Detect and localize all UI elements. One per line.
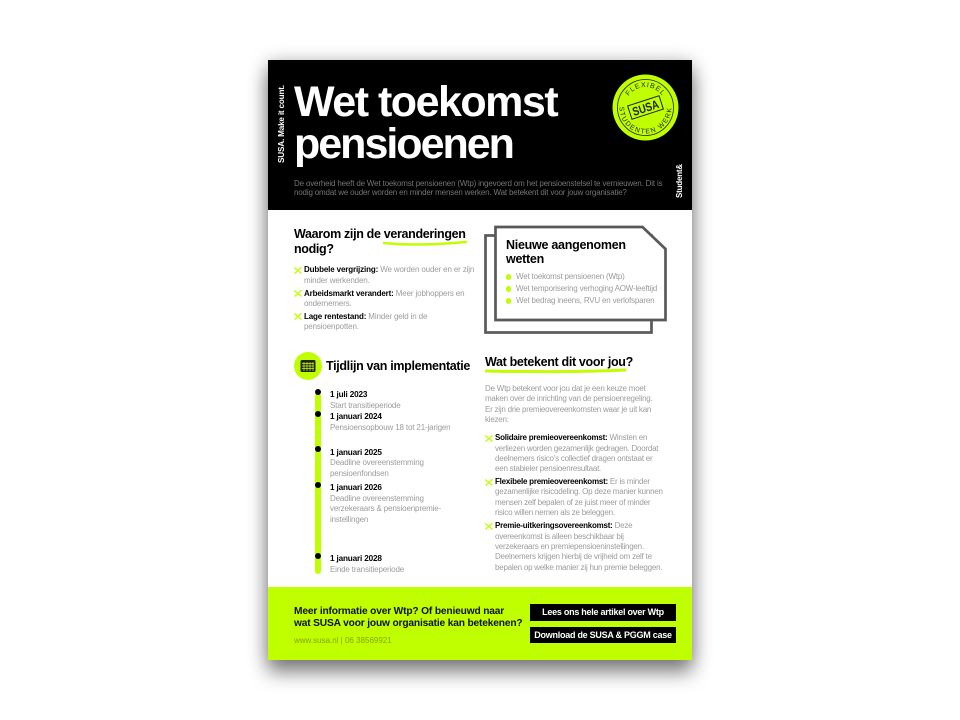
intro text: maken over de inrichting van de pensioenregeling. xyxy=(485,394,653,403)
badge: flexibel studenten werk: STUDENTEN WERK xyxy=(620,107,672,134)
entry 2023 xyxy=(330,390,401,410)
entry 2025: pensioenfondsen xyxy=(330,469,389,478)
option 1: deelnemers risico's collectief dragen ontstaat er xyxy=(495,454,652,463)
option 1 xyxy=(495,433,658,473)
dot xyxy=(315,411,321,417)
timeline bar xyxy=(315,393,321,574)
footer heading: wat SUSA voor jouw organisatie kan betekenen? xyxy=(294,618,522,629)
option 2: mensen zelf bepalen of ze juist meer of minder xyxy=(495,498,650,507)
entry 2025 xyxy=(330,448,424,478)
header intro text: De overheid heeft de Wet toekomst pensioenen (Wtp) ingevoerd om het pensioenstelsel te vernieuwen. Dit is xyxy=(294,179,662,188)
title: Wet toekomst xyxy=(294,78,557,126)
reason 3 xyxy=(304,312,428,331)
option 2: Flexibele premieovereenkomst: Er is minder xyxy=(495,477,650,486)
icon: check xyxy=(485,479,493,486)
badge: flexibel studenten werk xyxy=(612,74,678,140)
reason 1 xyxy=(304,265,474,285)
option 2: gezamenlijke risicodeling. Op deze manier kunnen xyxy=(495,487,663,496)
option 3: overeenkomst is alleen beschikbaar bij xyxy=(495,532,624,541)
header panel xyxy=(268,60,692,210)
footer heading xyxy=(294,606,522,629)
option 3: bepalen op welke manier zij hun premie beleggen. xyxy=(495,563,662,572)
footer band xyxy=(268,587,692,660)
option 2: risico willen nemen als ze beleggen. xyxy=(495,508,615,517)
entry 2028 xyxy=(330,554,404,574)
option 1: een stabieler pensioenresultaat. xyxy=(495,464,601,473)
icon: check xyxy=(485,523,493,530)
reason 1: Dubbele vergrijzing: We worden ouder en er zijn xyxy=(304,265,474,274)
reason 3: Lage rentestand: Minder geld in de xyxy=(304,312,427,321)
entry 2028: Einde transitieperiode xyxy=(330,565,404,574)
entry 2025: 1 januari 2025 xyxy=(330,448,382,457)
reason 2: ondernemers. xyxy=(304,299,352,308)
option 3 xyxy=(495,521,662,572)
side label: SUSA. Make it count.: SUSA. Make it count. xyxy=(276,85,286,163)
law 1: Wet toekomst pensioenen (Wtp) xyxy=(516,272,625,281)
title: pensioenen xyxy=(294,120,513,168)
panel heading: wetten xyxy=(506,252,544,266)
footer heading: Meer informatie over Wtp? Of benieuwd naar xyxy=(294,606,504,616)
intro text: kiezen: xyxy=(485,415,509,424)
badge: flexibel studenten werk: SUSA xyxy=(631,97,661,119)
badge: flexibel studenten werk: FLEXIBEL xyxy=(625,82,664,96)
entry 2026: Deadline overeenstemming xyxy=(330,494,424,503)
button: case xyxy=(530,626,676,643)
intro text xyxy=(485,384,653,424)
option 3: Deelnemers krijgen hierbij de vrijheid om zelf te xyxy=(495,552,652,561)
heading: wat betekent: Wat betekent dit voor jou? xyxy=(485,354,633,368)
heading highlight xyxy=(485,368,626,374)
button: artikel xyxy=(530,604,676,621)
option 1: verliezen worden gezamenlijk gedragen. Doordat xyxy=(495,444,658,453)
entry 2024: Pensioensopbouw 18 tot 21-jarigen xyxy=(330,423,450,432)
bullet xyxy=(506,286,511,292)
bullet xyxy=(506,274,511,280)
dot xyxy=(315,446,321,452)
panel: nieuwe wetten xyxy=(484,226,667,334)
entry 2026 xyxy=(330,483,441,524)
law 2: Wet temporisering verhoging AOW-leeftijd xyxy=(516,284,657,293)
entry 2026: instellingen xyxy=(330,515,368,524)
option 1: Solidaire premieovereenkomst: Winsten en xyxy=(495,433,647,442)
header intro text xyxy=(294,179,662,197)
entry 2024: 1 januari 2024 xyxy=(330,412,382,421)
entry 2026: 1 januari 2026 xyxy=(330,483,382,492)
panel heading xyxy=(506,238,626,266)
entry 2024 xyxy=(330,412,450,432)
reason 3: pensioenpotten. xyxy=(304,322,359,331)
heading: Waarom: nodig? xyxy=(294,242,334,256)
icon: check xyxy=(294,290,302,297)
dot xyxy=(315,553,321,559)
icon: check xyxy=(485,435,493,442)
entry 2023: Start transitieperiode xyxy=(330,401,401,410)
dot xyxy=(315,482,321,488)
option 3: verzekeraars en premiepensioeninstellingen. xyxy=(495,542,644,551)
icon: calendar xyxy=(294,352,322,380)
intro text: Er zijn drie premieovereenkomsten waar je uit kan xyxy=(485,405,651,414)
button: artikel: Lees ons hele artikel over Wtp xyxy=(542,607,664,617)
header intro text: nodig omdat we ouder worden en minder mensen werken. Wat betekent dit voor jouw organisatie? xyxy=(294,188,627,197)
heading: tijdlijn: Tijdlijn van implementatie xyxy=(326,358,470,372)
shadow and page xyxy=(268,60,692,660)
icon: check xyxy=(294,313,302,320)
entry 2028: 1 januari 2028 xyxy=(330,554,382,563)
option 2 xyxy=(495,477,663,517)
timeline xyxy=(315,394,321,574)
bullet xyxy=(506,298,511,304)
heading: Waarom: Waarom zijn de veranderingen xyxy=(294,226,466,240)
dot xyxy=(315,389,321,395)
entry 2025: Deadline overeenstemming xyxy=(330,458,424,467)
panel heading: Nieuwe aangenomen xyxy=(506,238,626,252)
reason 2 xyxy=(304,288,464,308)
button: case: Download de SUSA & PGGM case xyxy=(534,630,672,640)
icon: check xyxy=(294,267,302,274)
entry 2026: verzekeraars & pensioenpremie- xyxy=(330,504,441,513)
title xyxy=(294,78,558,168)
intro text: De Wtp betekent voor jou dat je een keuze moet xyxy=(485,384,646,393)
reason 2: Arbeidsmarkt verandert: Meer jobhoppers en xyxy=(304,288,464,298)
heading highlight xyxy=(383,240,467,246)
list: reasons xyxy=(294,265,474,331)
option 3: Premie-uitkeringsovereenkomst: Deze xyxy=(495,521,632,530)
footer contact: www.susa.nl | 06 38569921 xyxy=(294,636,392,644)
side label: Student&: Student& xyxy=(675,164,684,198)
entry 2023: 1 juli 2023 xyxy=(330,390,367,399)
reason 1: minder werkenden. xyxy=(304,276,370,285)
heading: Waarom xyxy=(294,226,466,256)
law 3: Wet bedrag ineens, RVU en verlofsparen xyxy=(516,296,654,305)
